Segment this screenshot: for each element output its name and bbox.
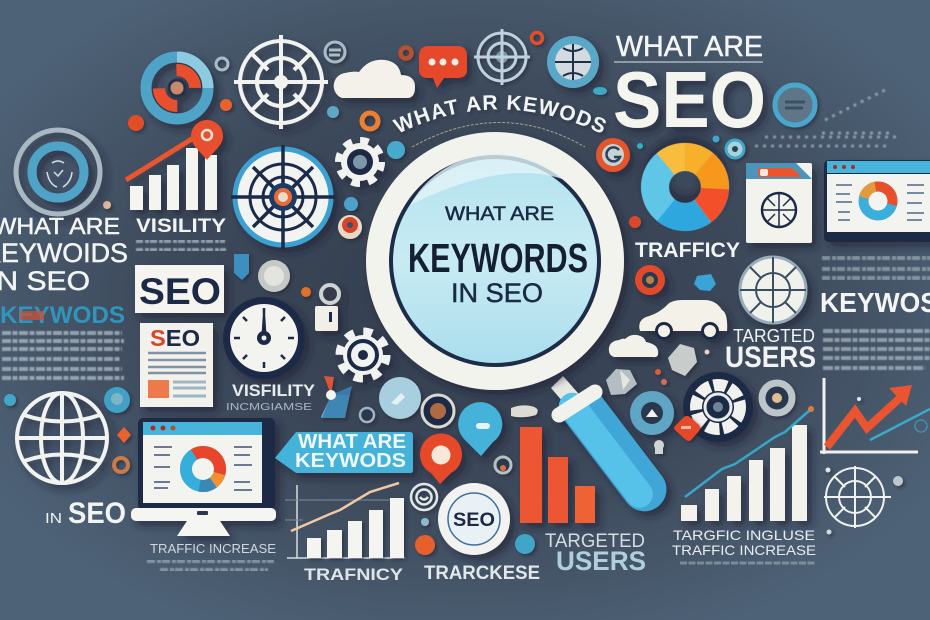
icon: red ring badge xyxy=(635,265,665,295)
label: targfic ingluse traffic increase: TRAFFIC INCREASE xyxy=(672,542,816,558)
icon: G badge xyxy=(596,138,630,172)
small scattered icons upper middle xyxy=(234,197,362,297)
icon: red and orange dots xyxy=(103,99,232,209)
label: traffic increase left: TRAFFIC INCREASE xyxy=(150,541,276,556)
caption lines under traffic increase xyxy=(147,561,274,570)
text: keywods blue heading: KEYWODS xyxy=(0,302,125,329)
red fragment in keywods xyxy=(20,311,44,320)
icon: spiral xyxy=(411,484,437,510)
card: SEO document: SEO xyxy=(150,325,200,351)
label: targted users right: USERS xyxy=(725,341,816,374)
heading: what are keywords in seo left xyxy=(0,213,128,296)
bar chart: rising bars with line xyxy=(681,406,814,521)
text block right xyxy=(823,331,930,368)
icon: blue circle badge xyxy=(630,391,674,435)
small teal rings xyxy=(629,136,744,228)
small blue puzzle piece xyxy=(694,274,716,291)
icon: white crosshair globe xyxy=(234,35,328,129)
lens text: what are: WHAT ARE xyxy=(445,204,554,225)
arc heading: what ar kewods: WHAT AR KEWODS xyxy=(392,95,608,136)
icon: monitor with donut chart xyxy=(131,418,276,536)
icon: red rounded badge xyxy=(654,416,700,454)
icon: cloud small xyxy=(609,335,658,357)
card: document with globe xyxy=(746,163,812,243)
text lines above keywords right xyxy=(822,258,930,278)
card: browser with donut xyxy=(824,160,930,242)
label: targted users right: TARGTED xyxy=(733,326,815,346)
label: targfic ingluse traffic increase: TARGFIC INGLUSE xyxy=(673,527,815,543)
icon: pale target top xyxy=(474,29,530,85)
lens text: in seo: IN SEO xyxy=(451,278,543,308)
label: trafficy: TRAFFICY xyxy=(635,239,740,262)
speech bubble: blue xyxy=(458,402,502,456)
label: targeted users bottom: USERS xyxy=(556,546,646,576)
label: in seo: SEO xyxy=(68,497,126,530)
small icons lower left xyxy=(4,387,131,472)
icon: segmented donut top left xyxy=(146,57,208,119)
label: visfility increase: INCMGIAMSE xyxy=(226,402,312,413)
badge: SEO circle xyxy=(438,483,510,555)
callout: what are keywods: KEYWODS xyxy=(295,450,406,472)
icon: navy segmented target xyxy=(683,372,753,442)
scribble text right of seo xyxy=(755,90,900,146)
icon: grey ring xyxy=(762,383,792,413)
label: in seo xyxy=(45,497,126,530)
icon: gear top xyxy=(340,142,380,182)
caption lines under visility xyxy=(136,241,226,250)
caption line bottom right xyxy=(680,562,815,564)
grey crumpled icons xyxy=(606,344,710,395)
callout: what are keywods: WHAT ARE xyxy=(298,431,406,453)
heading: what are seo right: WHAT ARE xyxy=(616,31,763,63)
heading: what are seo right: SEO xyxy=(613,55,766,144)
label: targeted users bottom: TARGETED xyxy=(545,531,645,552)
icon: car xyxy=(639,300,727,338)
icon: cloud top xyxy=(334,60,415,98)
label: trarckese: TRARCKESE xyxy=(424,563,540,584)
magnifying glass handle xyxy=(551,376,666,511)
small scatter right xyxy=(826,397,903,534)
label: targfic ingluse traffic increase xyxy=(672,527,816,558)
icon: blue ring badge xyxy=(775,85,815,125)
icon: fan pie xyxy=(321,376,352,418)
icon: blue globe top xyxy=(547,36,599,88)
label: targeted users bottom xyxy=(545,531,646,576)
icon: gear lower xyxy=(341,333,385,377)
icon: clock xyxy=(223,297,305,379)
label: visility: VISILITY xyxy=(136,216,226,237)
icon: ring target left xyxy=(16,130,100,214)
chart: red arrow on axes xyxy=(820,378,930,454)
bar chart: visibility xyxy=(126,120,223,210)
icon: padlock xyxy=(315,285,339,331)
icon: small grey swirl badges xyxy=(216,42,345,70)
icon: red speech bubble xyxy=(419,46,467,88)
icon: target globe right xyxy=(740,257,806,323)
bar chart: traffic xyxy=(285,483,405,558)
blobs by SEO badge xyxy=(415,518,535,555)
label: in seo: IN xyxy=(45,510,62,527)
label: visfility increase: VISFILITY xyxy=(232,381,316,400)
magnifying glass lens xyxy=(366,132,624,390)
speech bubble: red xyxy=(420,434,462,484)
icon: thin white globe right xyxy=(824,466,891,528)
bar chart: red bars xyxy=(520,427,595,523)
badges lower middle xyxy=(360,377,538,473)
label: targted users right xyxy=(725,326,816,374)
icon: globe lower left xyxy=(17,393,107,483)
badge: SEO circle: SEO xyxy=(453,510,495,531)
pie chart: traffic donut xyxy=(643,145,727,229)
small ring icons top xyxy=(327,32,607,159)
text block left xyxy=(2,333,124,378)
lens text: keywords: KEYWORDS xyxy=(408,235,588,281)
callout: what are keywods xyxy=(275,431,413,473)
icon: big target xyxy=(231,145,335,249)
card: SEO label: SEO xyxy=(139,271,221,312)
label: trafnicy: TRAFNICY xyxy=(304,565,404,584)
label: visfility increase xyxy=(226,381,316,413)
card: SEO document xyxy=(140,323,213,407)
